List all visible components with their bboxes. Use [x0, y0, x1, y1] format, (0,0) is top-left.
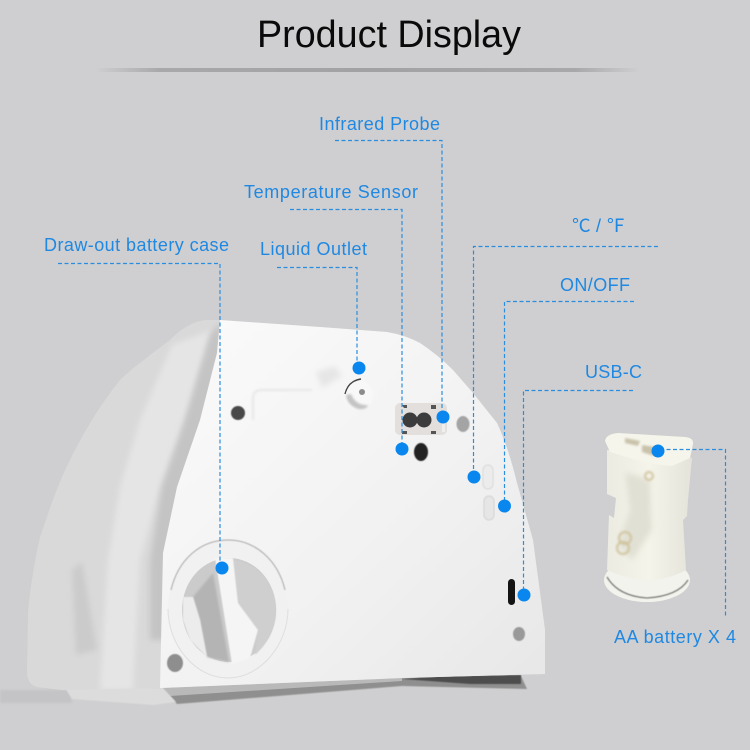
- battery flange: [604, 558, 690, 602]
- button C/F: [483, 465, 493, 489]
- infrared probe panel: [395, 403, 447, 435]
- mounting hole right: [513, 627, 525, 641]
- device front face: [160, 320, 545, 688]
- callout: AA battery: AA battery X 4: [614, 627, 736, 647]
- title divider: [95, 68, 640, 72]
- liquid outlet: [343, 379, 373, 410]
- callout: AA battery: [614, 444, 736, 647]
- raised panel on face: [253, 390, 312, 420]
- callout: Liquid Outlet: [260, 239, 367, 374]
- temperature sensor: [414, 443, 428, 461]
- mounting hole left: [167, 654, 183, 672]
- left dark band: [193, 573, 229, 662]
- screw: [231, 406, 245, 420]
- callout: USB-C: USB-C: [585, 362, 642, 382]
- callout: Liquid Outlet: Liquid Outlet: [260, 239, 367, 259]
- button on/off: [484, 496, 494, 520]
- callout: Temperature Sensor: Temperature Sensor: [244, 182, 418, 202]
- side hole: [456, 416, 470, 432]
- battery holder: [604, 433, 693, 602]
- battery spring: [617, 472, 653, 554]
- battery case dial: [168, 540, 288, 678]
- callout: USB-C: [518, 362, 642, 602]
- battery contact: [625, 438, 655, 456]
- device body outline: [27, 320, 545, 690]
- callout: Draw-out battery case: [44, 235, 229, 574]
- battery top cap: [605, 433, 693, 466]
- callout: temperature unit: ℃ / ℉: [572, 216, 625, 236]
- dial handle: [215, 558, 258, 664]
- device base and shadow: [65, 671, 527, 705]
- callout: temperature unit: [468, 216, 658, 484]
- callout: Infrared Probe: Infrared Probe: [319, 114, 440, 134]
- left white bar: [183, 597, 207, 657]
- right crescent shade: [233, 560, 276, 655]
- battery channels: [618, 472, 652, 560]
- USB-C port: [508, 579, 515, 605]
- ground shadow left: [0, 690, 72, 703]
- flange ring: [607, 577, 688, 598]
- callout: Infrared Probe: [319, 114, 450, 424]
- device side facets: [72, 322, 222, 690]
- callout: ON/OFF: ON/OFF: [560, 275, 630, 295]
- callout: Draw-out battery case: Draw-out battery case: [44, 235, 229, 255]
- product: main device: [27, 320, 545, 705]
- title: Product Display: [257, 14, 521, 56]
- callout: Temperature Sensor: [244, 182, 418, 456]
- callout: ON/OFF: [498, 275, 634, 512]
- soft shade near outlet: [316, 366, 342, 388]
- battery body: [607, 450, 692, 580]
